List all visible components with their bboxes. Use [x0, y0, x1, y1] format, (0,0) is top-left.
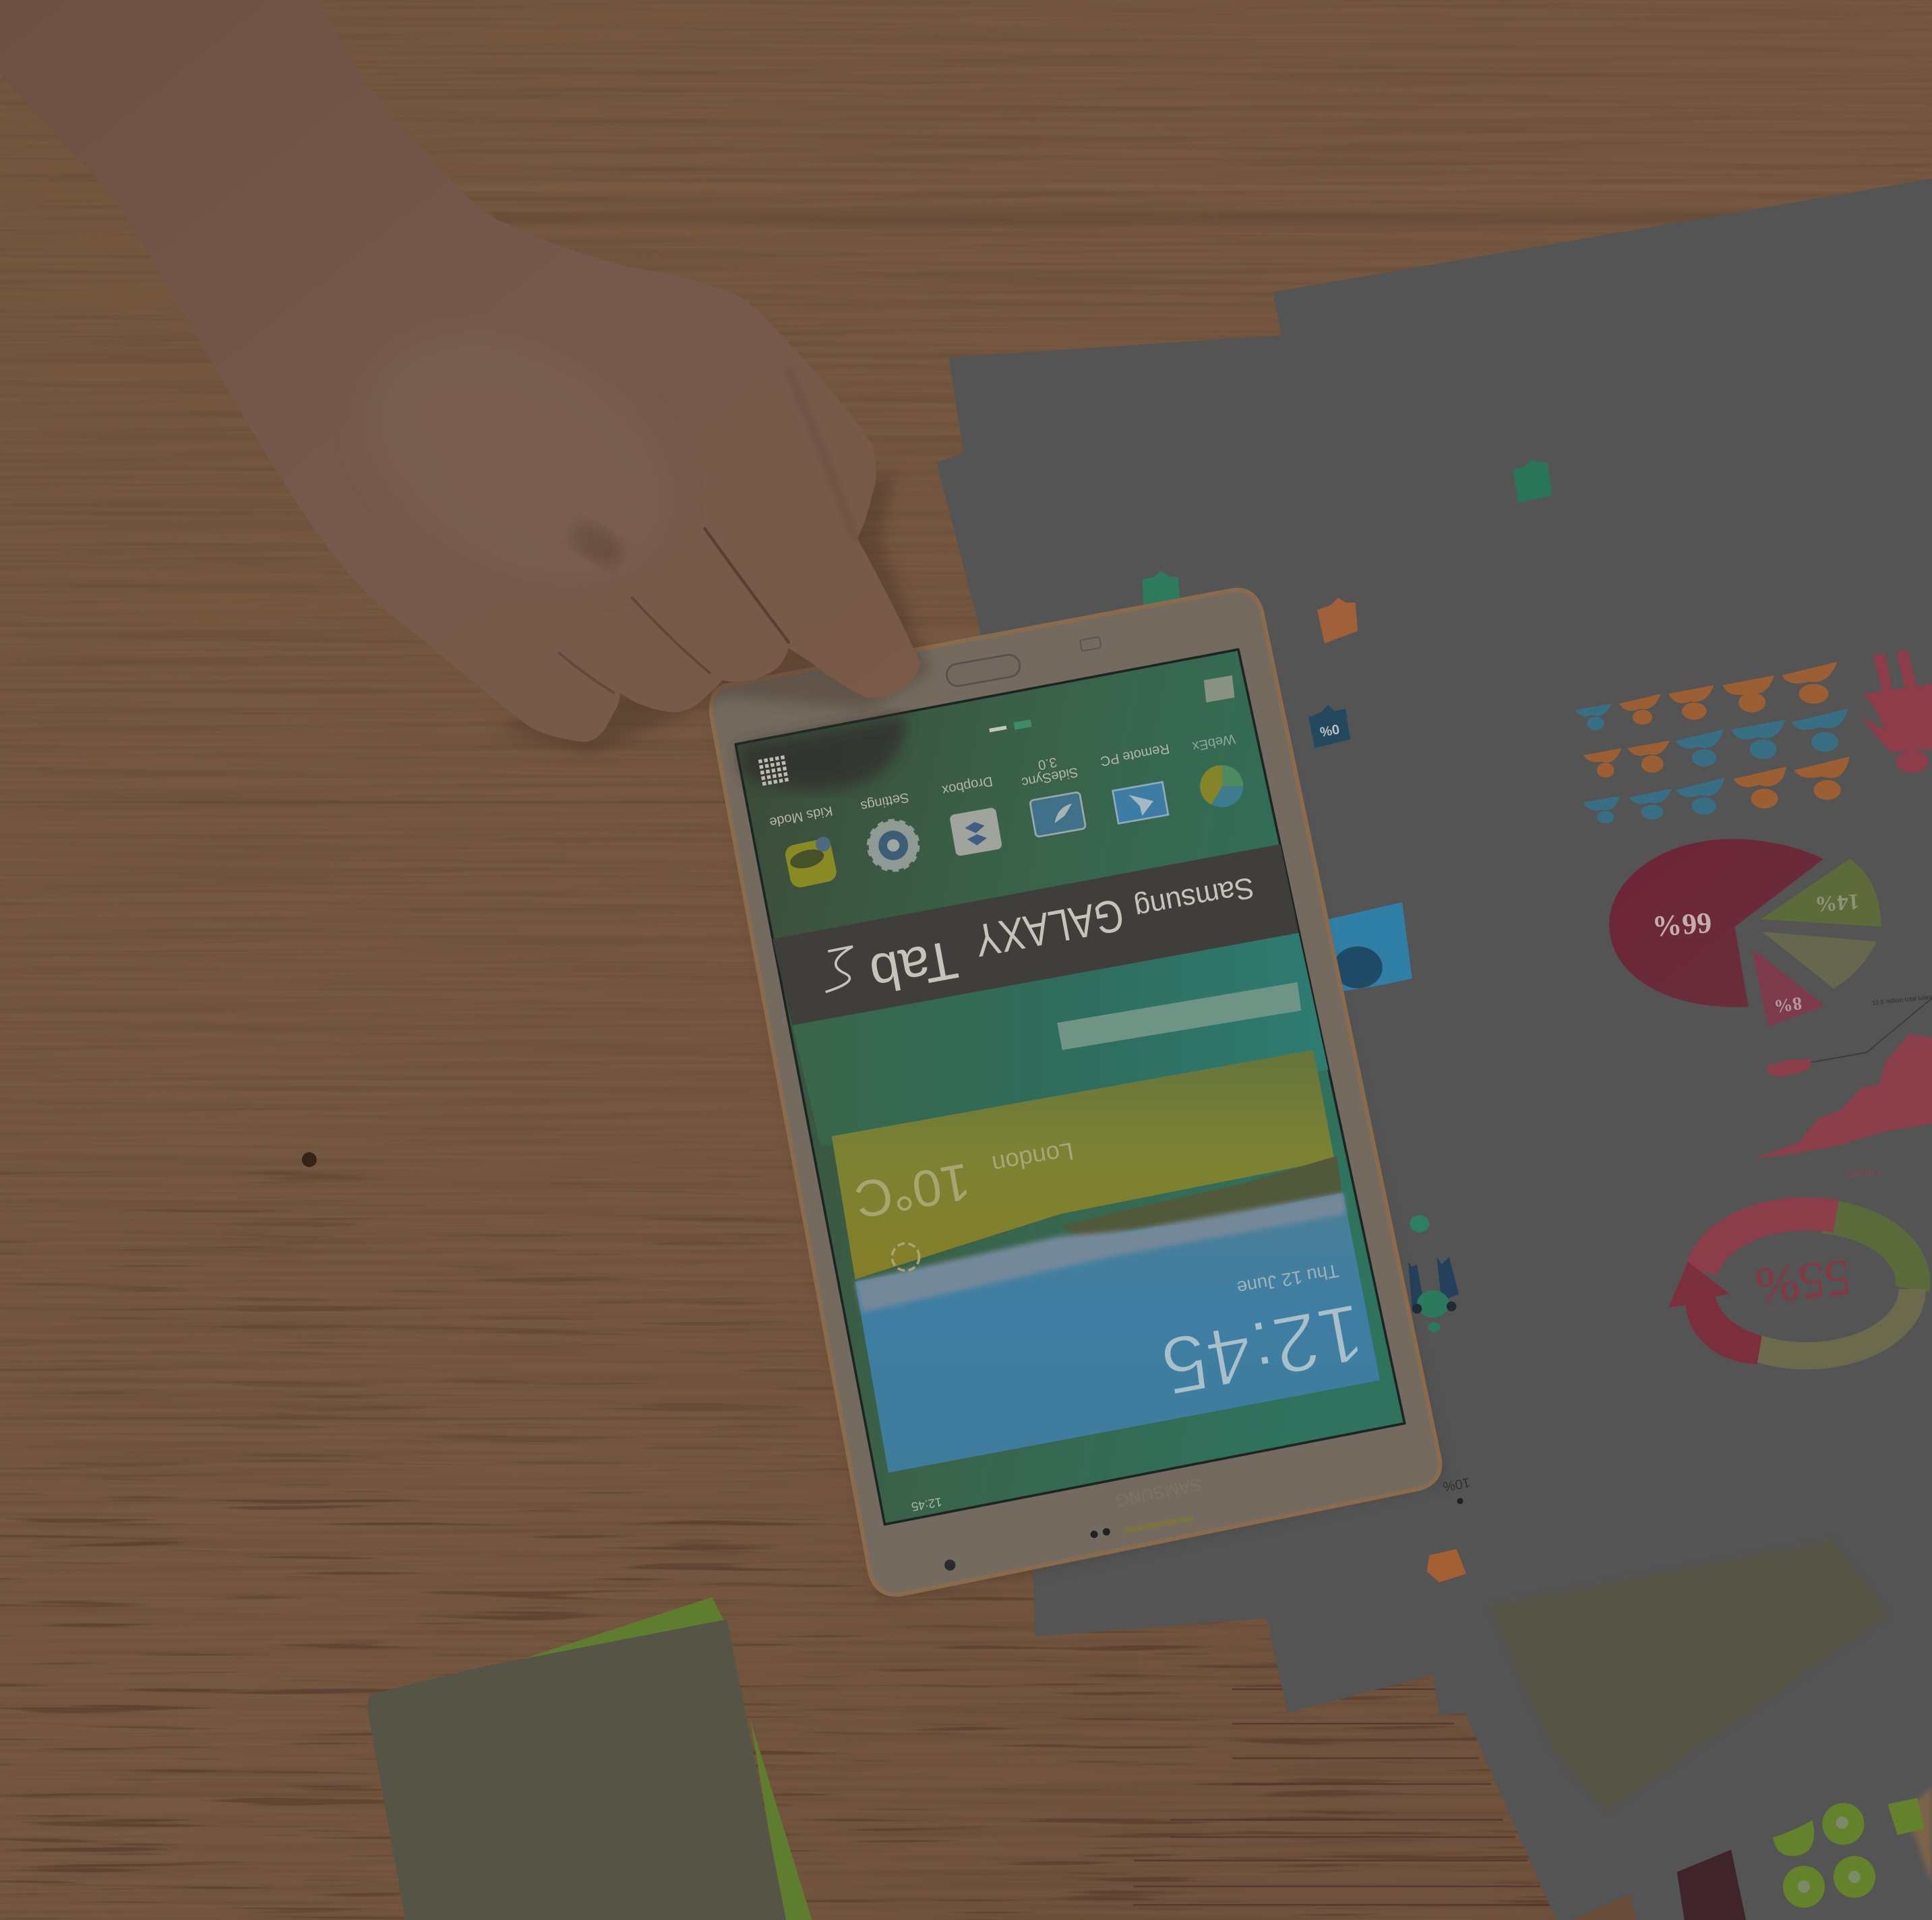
world map with callout line: Canada: [1845, 1166, 1881, 1180]
sticky notes bottom left: [367, 1597, 812, 1920]
icon: small teal marker: [1410, 1215, 1429, 1232]
people pictogram chart: [1575, 662, 1850, 823]
app: SideSync 3.0: 3.0: [1037, 754, 1058, 773]
icon: green tag: [1513, 460, 1552, 503]
app row: [768, 731, 1243, 889]
weather text: London: [990, 1137, 1076, 1178]
app: SideSync 3.0: [1021, 754, 1086, 837]
row 1: [1575, 704, 1612, 730]
app: Kids Mode: [768, 803, 839, 889]
pie slice: 66%: [1609, 839, 1823, 1007]
bar: maroon: [1677, 1850, 1746, 1920]
sky and water: [855, 1193, 1380, 1472]
icon: red hand pictogram: [1861, 649, 1932, 773]
weather photo widget: [832, 1050, 1380, 1472]
pie chart: [1609, 839, 1881, 1027]
icon: green square: [1888, 1798, 1925, 1835]
world map with callout line: [1753, 993, 1932, 1180]
pie slice: 66%: 66%: [1652, 906, 1713, 942]
icon: green badge 1: [1773, 1820, 1814, 1856]
icon: blue panel with dark blob: [1328, 902, 1412, 992]
banner: Samsung GALAXY Tab: Samsung: [1132, 870, 1257, 925]
knuckle shadow: [565, 516, 628, 571]
app: Settings: [859, 789, 918, 870]
banner: Samsung GALAXY Tab: Tab: [866, 928, 962, 1004]
ring: arrow head and lower red: [1668, 1262, 1762, 1364]
tablet: [711, 590, 1444, 1602]
clock text: 12:45: [1155, 1286, 1371, 1413]
icon: dark blue tag: [1308, 705, 1350, 748]
row 2: [1583, 741, 1670, 777]
icon: green ring 2: [1822, 1803, 1864, 1844]
label: 10%: 10%: [1442, 1474, 1471, 1494]
speaker and camera dots: SAMSUNG: [1114, 1474, 1203, 1509]
app: Kids Mode: Kids Mode: [768, 803, 834, 830]
app: Dropbox: Dropbox: [941, 773, 994, 798]
dark wallpaper shadow: [739, 715, 905, 790]
pie slice: 8%: 8%: [1773, 993, 1803, 1017]
pie slice: pale: [1762, 932, 1877, 988]
icon: people figures: [1408, 1257, 1459, 1332]
ring: pale segment: [1757, 1289, 1912, 1356]
icon: green ring 3: [1783, 1866, 1825, 1908]
search bar: [1057, 982, 1301, 1050]
donut arrow chart 55%: [1668, 1213, 1913, 1364]
green circular icons and maroon bar: [1677, 1787, 1932, 1920]
icon: apps grid: [758, 756, 790, 784]
pale yellow paper panel: [1490, 1540, 1889, 1810]
stack of printed paper sheets: [936, 179, 1932, 1920]
tablet screen: [735, 649, 1405, 1524]
photo edge: beige: [1904, 1787, 1932, 1886]
cloud band: [855, 1193, 1346, 1313]
icon: dark blue tag: 0%: [1319, 721, 1341, 739]
label: 55%: 55%: [1753, 1249, 1853, 1315]
ring: green segment: [1823, 1216, 1913, 1289]
tag markers and small icons on paper: [1142, 460, 1552, 1582]
grass field: [832, 1050, 1335, 1279]
pie slice: 14%: 14%: [1814, 889, 1860, 916]
ring: red top segment: [1701, 1213, 1836, 1271]
hand cast shadow: [493, 469, 930, 754]
tree line: [1061, 1156, 1341, 1240]
icon: green tag behind tablet: [1142, 570, 1180, 606]
lower wallpaper area: [792, 933, 1328, 1146]
app: Dropbox: [941, 773, 1002, 857]
hand and forearm: [0, 0, 930, 754]
banner: Samsung GALAXY Tab: [773, 844, 1299, 1025]
status bar: 12:45: [910, 1495, 943, 1514]
world map with callout line: 10.5 million total sales: [1872, 993, 1932, 1007]
label: 10%: [1442, 1474, 1471, 1504]
tablet body: [711, 590, 1440, 1594]
icon: orange hexagon marker: [1427, 1549, 1466, 1582]
home button: [945, 653, 1021, 688]
finger creases: [560, 369, 855, 692]
hand silhouette: [0, 0, 920, 742]
pie slice: 14%: [1761, 859, 1881, 927]
app: Remote PC: Remote PC: [1099, 741, 1171, 769]
app: WebEx: [1191, 731, 1243, 807]
row 3: [1583, 777, 1725, 823]
back of hand highlight: [326, 285, 708, 627]
app: Settings: Settings: [859, 789, 910, 814]
tablet shadow: [715, 601, 1444, 1602]
icon: green ring 4: [1834, 1856, 1875, 1898]
pie slice: 8%: [1752, 949, 1825, 1027]
app: Remote PC: [1099, 741, 1171, 824]
date text: Thu 12 June: [1236, 1260, 1340, 1298]
weather text: 10°C: [851, 1152, 974, 1228]
icon: corner widget: [1204, 676, 1234, 702]
icon: orange tag: [1317, 598, 1358, 643]
speaker and camera dots: [944, 1474, 1203, 1571]
weather text: [851, 1137, 1076, 1271]
app: SideSync 3.0: SideSync: [1021, 764, 1079, 789]
app: WebEx: WebEx: [1191, 731, 1236, 754]
page indicator: [989, 719, 1032, 732]
front camera detail: [1080, 636, 1101, 651]
banner: Samsung GALAXY Tab: GALAXY: [971, 889, 1128, 966]
